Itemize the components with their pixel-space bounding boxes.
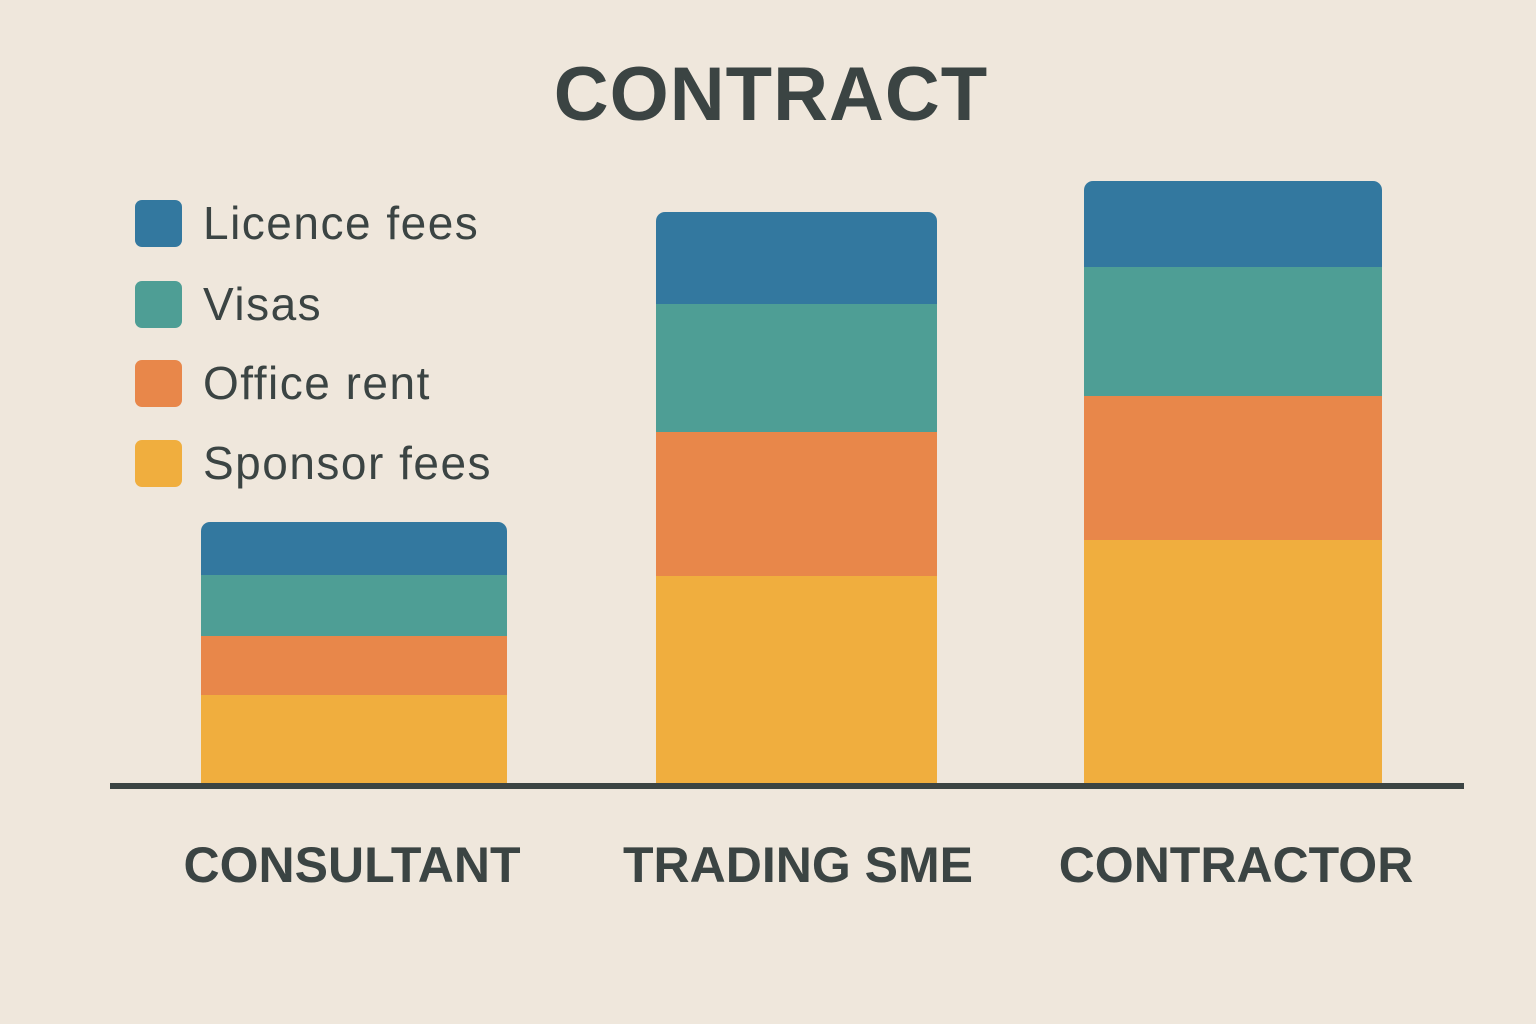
label: trading sme: TRADING SME bbox=[623, 837, 973, 893]
legend bbox=[135, 197, 492, 489]
legend: office rent bbox=[135, 357, 431, 409]
legend: Visas bbox=[203, 278, 322, 330]
legend: sponsor fees bbox=[135, 437, 492, 489]
legend: Sponsor fees bbox=[203, 437, 492, 489]
legend: visas bbox=[135, 278, 322, 330]
axis line bbox=[110, 783, 1464, 789]
bar: consultant bbox=[201, 522, 507, 783]
title: CONTRACT bbox=[554, 52, 988, 137]
legend: licence fees bbox=[135, 197, 479, 249]
bar: trading sme bbox=[656, 212, 937, 783]
legend: Office rent bbox=[203, 357, 431, 409]
legend: Licence fees bbox=[203, 197, 479, 249]
label: contractor: CONTRACTOR bbox=[1059, 837, 1413, 893]
label: consultant: CONSULTANT bbox=[184, 837, 520, 893]
bar: contractor bbox=[1084, 181, 1382, 783]
